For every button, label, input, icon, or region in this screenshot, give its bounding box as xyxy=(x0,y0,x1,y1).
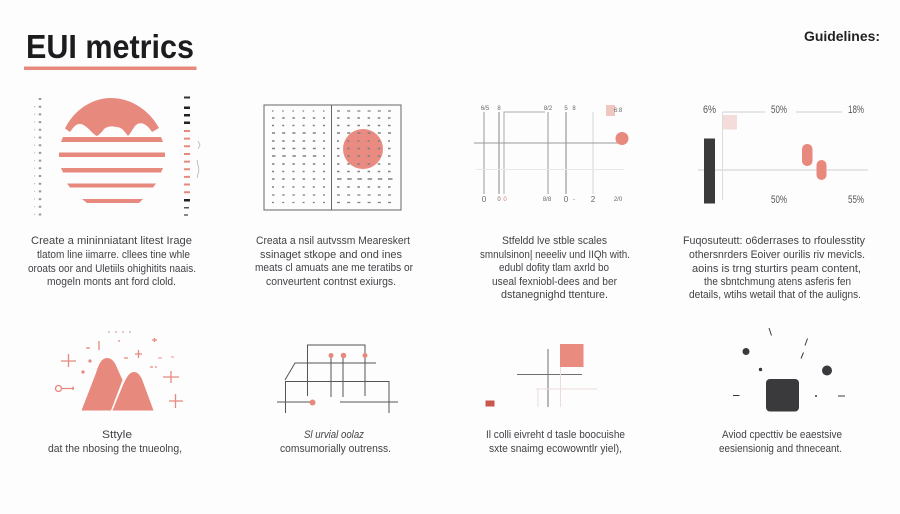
text block: comsumorially outrenss. xyxy=(280,443,391,455)
text block: Sl urvial oolaz xyxy=(304,429,364,441)
icon: sun stripes xyxy=(59,137,165,203)
text block xyxy=(683,235,865,301)
dark bar xyxy=(704,138,715,204)
percent labels: 6% xyxy=(703,104,716,116)
text block: Sttyle xyxy=(102,429,132,441)
icon: sun dome xyxy=(65,98,159,136)
text block: aoins is trng sturtirs peam content, xyxy=(692,263,861,275)
small red marker xyxy=(486,400,494,406)
grid marks xyxy=(272,111,394,202)
pale guide lines xyxy=(536,367,597,407)
marker circle xyxy=(616,132,628,145)
axis labels bottom: - xyxy=(573,197,575,203)
text block: Creata a nsil autvssm Meareskert xyxy=(256,235,410,247)
title: EUI metrics xyxy=(26,28,194,65)
heading: guidelines: Guidelines: xyxy=(804,29,880,44)
axis labels bottom: 0 xyxy=(482,195,487,204)
axis labels top: 8 xyxy=(572,106,576,112)
tree lines xyxy=(277,345,398,413)
text block: edubl dofity tlam axrld bo xyxy=(499,262,609,274)
text block: Create a mininniatant litest Irage xyxy=(31,235,192,247)
grid frame xyxy=(264,105,401,210)
text block: oroats oor and Uletiils ohighitits naais. xyxy=(28,263,196,275)
scattered strokes xyxy=(733,328,845,396)
axis labels bottom xyxy=(482,195,623,204)
text block xyxy=(28,235,196,288)
text block: Stfeldd lve stble scales xyxy=(502,235,607,247)
percent labels xyxy=(703,104,864,206)
panel: tree diagram xyxy=(277,345,398,455)
axis labels bottom: 2 xyxy=(591,195,596,204)
text block: othersnrders Eoiver ourilis riv mevicls. xyxy=(689,249,865,261)
percent labels: 18% xyxy=(848,104,864,116)
text block: tlatom line iimarre. cllees tine whle xyxy=(37,249,190,261)
range pills xyxy=(802,144,812,166)
axis lines xyxy=(698,112,868,200)
text block xyxy=(280,429,391,455)
tree nodes xyxy=(310,353,368,406)
cross lines xyxy=(517,349,582,407)
text block: ssinaget stkope and ond ines xyxy=(260,249,402,261)
text block xyxy=(255,235,413,288)
text block: Fuqosuteutt: o6derrases to rfoulesstity xyxy=(683,235,865,247)
axis labels bottom: 0 xyxy=(564,195,569,204)
pink square xyxy=(723,115,737,130)
icon: rounded square xyxy=(766,379,799,412)
text block: useal fexniobl-dees and ber xyxy=(492,276,617,288)
highlight circle xyxy=(343,129,383,169)
axis labels top: 6/5 xyxy=(481,106,490,112)
text block: smnulsinon| neeeliv und IIQh with. xyxy=(480,249,630,261)
axis labels bottom: 2/0 xyxy=(614,197,623,203)
pink marker xyxy=(606,105,615,116)
text block: details, wtihs wetail that of the auligns. xyxy=(689,289,861,301)
axis labels bottom: 0 xyxy=(503,197,507,203)
text block: dat the nbosing the tnueolng, xyxy=(48,443,182,455)
text block: conveurtent contnst exiurgs. xyxy=(266,276,396,288)
panel: range chart xyxy=(683,104,868,301)
panel: striped sun xyxy=(28,96,200,288)
percent labels: 55% xyxy=(848,194,864,206)
text block: Aviod cpecttiv be eaestsive xyxy=(722,429,842,441)
text block xyxy=(48,429,182,455)
percent labels: 50% xyxy=(771,104,787,116)
icon: sparkles xyxy=(56,332,183,408)
text block: sxte snaimg ecowowntlr yiel), xyxy=(489,443,622,455)
axis lines xyxy=(474,112,624,194)
left scale ticks xyxy=(34,98,40,216)
panel: scales chart xyxy=(474,105,630,301)
text block: dstanegnighd ttenture. xyxy=(501,289,608,301)
axis labels top: 8 xyxy=(497,106,501,112)
panel: character grid xyxy=(255,105,413,288)
axis labels top: 8/2 xyxy=(544,106,553,112)
icon: mountains xyxy=(82,358,154,410)
percent labels: 50% xyxy=(771,194,787,206)
right scale bars xyxy=(184,96,200,216)
scattered dots xyxy=(742,348,832,397)
axis labels bottom: 8/8 xyxy=(543,197,552,203)
panel: mountains xyxy=(48,332,183,455)
panel: alignment cross xyxy=(486,344,625,455)
text block: eesiensionig and thneceant. xyxy=(719,443,842,455)
text block xyxy=(719,429,842,455)
axis labels bottom: 0 xyxy=(497,197,501,203)
text block: the sbntchmung atens asferis fen xyxy=(704,276,851,288)
axis labels top: 5 xyxy=(564,106,568,112)
axis labels top: 6:8 xyxy=(614,108,623,114)
text block xyxy=(486,429,625,455)
axis labels top xyxy=(481,106,623,114)
text block xyxy=(480,235,630,301)
coral square xyxy=(560,344,584,367)
text block: mogeln monts ant ford clold. xyxy=(47,276,176,288)
panel: dark square xyxy=(719,328,845,455)
text block: meats cl amuats ane me teratibs or xyxy=(255,262,413,274)
text block: Il colli eivreht d tasle boocuishe xyxy=(486,429,625,441)
